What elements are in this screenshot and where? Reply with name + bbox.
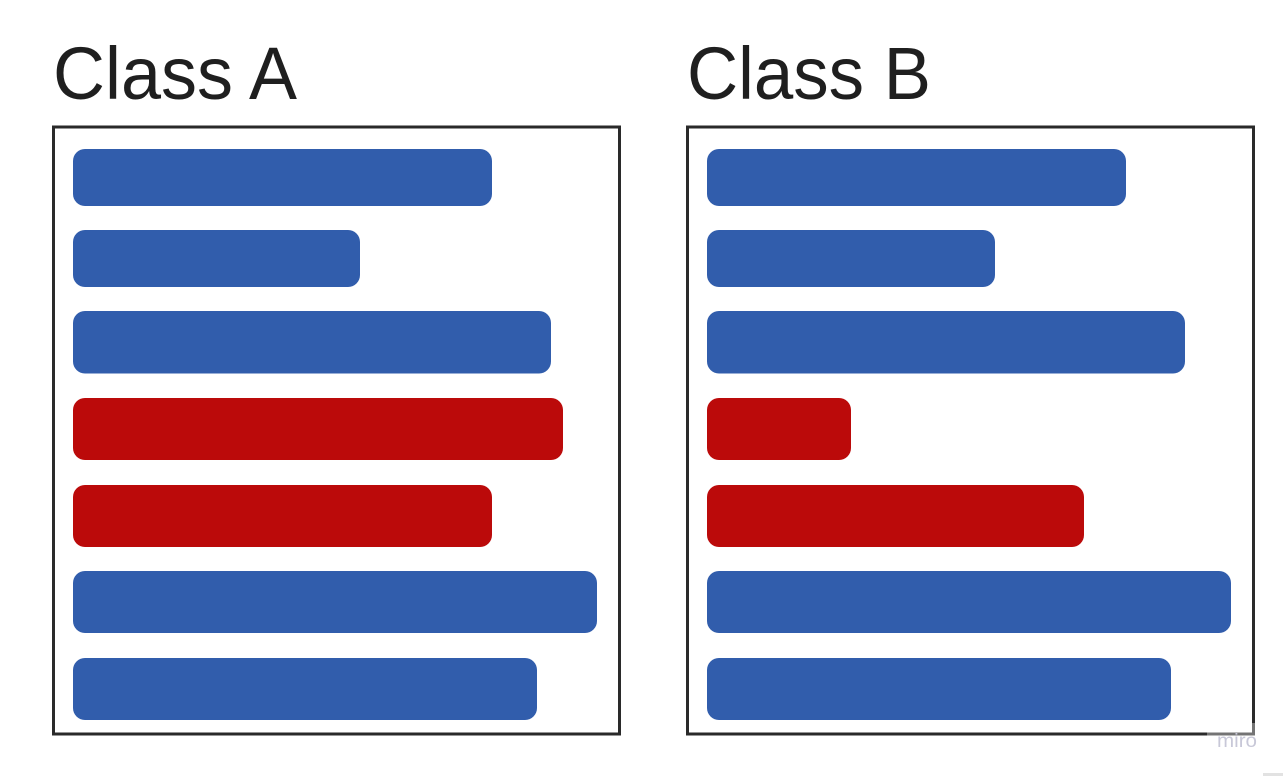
bar A6 blue xyxy=(73,571,597,633)
bar B2 blue xyxy=(707,230,995,287)
panel frame A xyxy=(54,127,620,734)
bar B7 blue xyxy=(707,658,1171,720)
corner mark xyxy=(1263,773,1283,776)
bar B5 red xyxy=(707,485,1084,547)
heading: Class B: Class B xyxy=(687,32,931,115)
bar A3 blue xyxy=(73,311,551,374)
heading: Class A: Class A xyxy=(53,32,298,115)
panel: Class A xyxy=(53,32,620,734)
bar A1 blue xyxy=(73,149,492,206)
bar A7 blue xyxy=(73,658,537,720)
panel frame B xyxy=(688,127,1254,734)
panel: Class B xyxy=(687,32,1254,734)
bar B6 blue xyxy=(707,571,1231,633)
bar B3 blue xyxy=(707,311,1185,374)
bar A4 red xyxy=(73,398,563,460)
watermark: miro xyxy=(1207,723,1258,752)
watermark: miro: miro xyxy=(1217,731,1257,752)
bar A5 red xyxy=(73,485,492,547)
bar B1 blue xyxy=(707,149,1126,206)
bar A2 blue xyxy=(73,230,360,287)
bar B4 red xyxy=(707,398,851,460)
